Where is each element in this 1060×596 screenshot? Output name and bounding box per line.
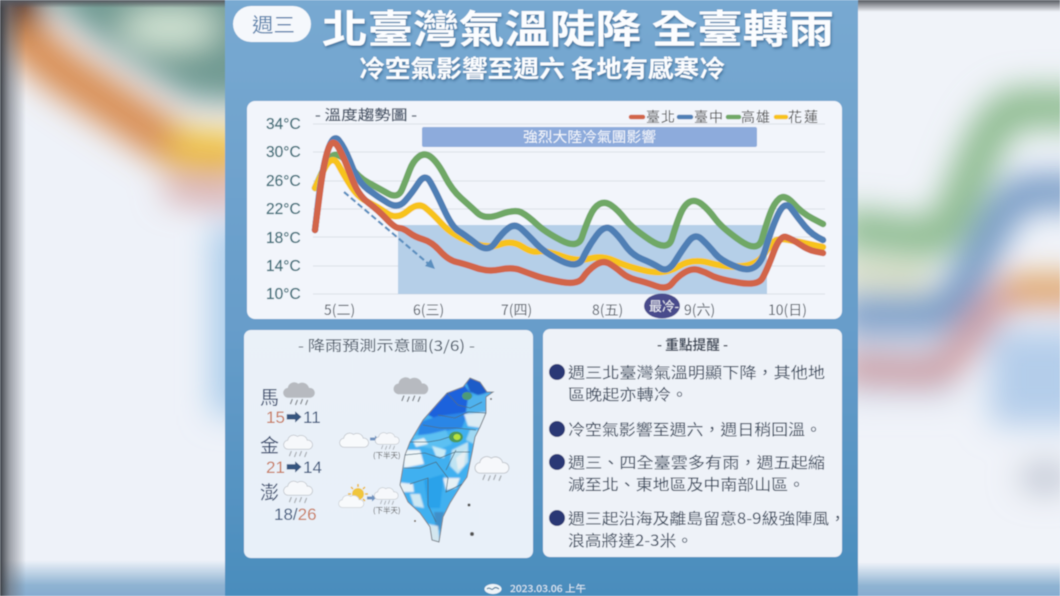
Kinmen forecast [260,431,322,477]
Penghu forecast: 18/26 [274,505,317,524]
temperature lines [315,138,823,288]
y axis labels: 34°C [266,116,301,133]
blurred background: left side [0,0,226,596]
x axis labels: 5(二) [324,300,355,320]
footer: agency logo and date [484,581,586,595]
x axis labels: 6(三) [413,300,444,320]
reminder 4 [549,507,846,551]
Penghu forecast [260,478,317,524]
icon: cloud then afternoon rain [340,433,401,461]
legend: 臺中 [694,107,723,127]
title: 北臺灣氣溫陡降 全臺轉雨 [322,0,834,55]
y axis labels: 18°C [266,230,301,247]
reminder 3: 週三、四全臺雲多有雨，週五起縮 [568,451,825,473]
reminder 3: 減至北、東地區及中南部山區。 [568,473,805,495]
y axis labels: 30°C [266,144,301,161]
panel: rainfall forecast [244,330,533,558]
x axis labels [324,300,807,320]
icon: cloud then afternoon rain: (下半天) [373,450,401,461]
panel: key reminders [543,329,846,557]
y axis labels: 26°C [266,173,301,190]
reminder 4: 週三起沿海及離島留意8-9級強陣風， [568,507,846,529]
y axis labels [266,116,301,303]
Matsu forecast [260,382,321,427]
footer: agency logo and date: 2023.03.06 上午 [510,581,586,595]
icon: sun with cloud then afternoon rain [339,484,401,516]
Kaohsiung line [315,154,823,246]
icon: white rain cloud east [475,457,509,480]
legend: 花蓮 [788,107,818,127]
x axis labels: 7(四) [501,300,532,320]
day badge: 週三 [252,9,295,38]
legend [631,107,818,127]
y axis labels: 22°C [266,201,301,218]
Matsu forecast: 11 [303,408,321,427]
x axis labels: 8(五) [592,300,623,320]
reminder 4: 浪高將達2-3米。 [568,529,693,551]
heavy rain spots [462,392,472,400]
Kinmen forecast: 金 [260,431,279,458]
cold air mass banner [422,127,757,147]
day badge [233,6,311,42]
reminder 1 [549,361,825,405]
panel: temperature trend chart [247,101,842,320]
Taipei line [315,143,823,288]
icon: sun with cloud then afternoon rain: (下半天) [373,505,401,516]
y axis labels: 10°C [266,286,301,303]
chart heading: - 溫度趨勢圖 - [315,105,417,125]
coldest day marker: 最冷- [649,296,679,315]
legend: 臺北 [646,107,675,127]
Kinmen forecast: ➡ [286,460,302,477]
Matsu forecast: 馬 [260,383,279,410]
reminders heading: - 重點提醒 - [657,335,728,355]
x axis labels: 9(六) [684,300,715,320]
Matsu forecast: ➡ [286,410,302,427]
subtitle: 冷空氣影響至週六 各地有感寒冷 [359,49,725,84]
Kinmen forecast: 14 [303,458,322,477]
y axis labels: 14°C [266,258,301,275]
icon: grey rain cloud north [394,377,428,401]
reminder 2: 冷空氣影響至週六，週日稍回溫。 [568,418,822,440]
outlying islands [468,504,470,506]
center poster background [225,0,858,596]
legend: 高雄 [741,107,770,127]
rainfall heading: - 降雨預測示意圖(3/6) - [298,335,475,356]
reminder 3 [549,451,825,495]
blurred background: right side [840,0,1060,596]
x axis labels: 10(日) [768,300,807,320]
reminder 1: 週三北臺灣氣溫明顯下降，其他地 [568,361,825,383]
arrow: cooling trend [344,192,435,269]
shaded cold period [398,225,767,294]
Taichung line [315,138,823,270]
Hualien line [315,160,823,272]
map: Taiwan rainfall [395,372,495,545]
county borders [400,378,493,542]
reminder 1: 區晚起亦轉冷。 [568,383,688,405]
Penghu forecast: 澎 [260,478,279,505]
cold air mass banner: 強烈大陸冷氣團影響 [523,127,656,147]
Matsu forecast: 15 [266,408,285,427]
coldest day marker [644,294,680,318]
Kinmen forecast: 21 [266,458,285,477]
